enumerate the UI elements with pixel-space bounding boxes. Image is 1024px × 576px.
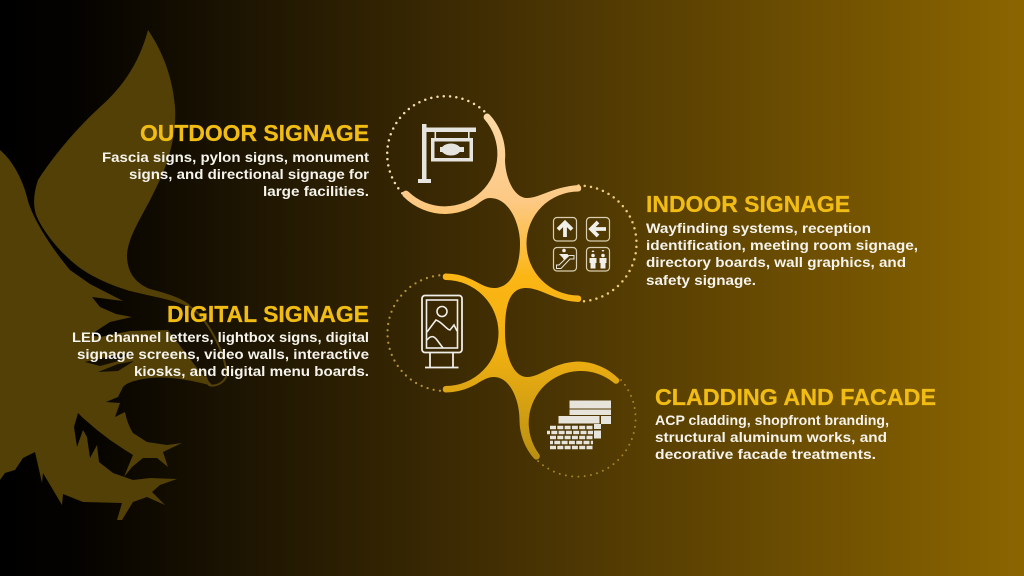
description: digital signage: signage screens, video walls, interactive [77,346,369,362]
description: outdoor signage [102,149,370,199]
dotted arc: outdoor [387,96,489,196]
description: cladding and facade [655,412,889,462]
heading: cladding and facade: CLADDING AND FACADE [655,384,936,410]
eagle feather outline [187,305,227,386]
description: cladding and facade: structural aluminum works, and [655,429,887,445]
description: indoor signage: safety signage. [646,272,756,288]
text block: cladding and facade [655,384,936,462]
heading: digital signage: DIGITAL SIGNAGE [167,301,369,327]
description: indoor signage: Wayfinding systems, reception [646,220,871,236]
eagle wing [34,30,190,306]
description: outdoor signage: large facilities. [263,183,369,199]
description: digital signage [72,329,369,379]
text block: indoor signage [646,191,918,288]
heading: indoor signage: INDOOR SIGNAGE [646,191,850,217]
dotted arc: cladding [534,380,636,477]
diagram: four linked circles [387,96,636,477]
description: digital signage: LED channel letters, lightbox signs, digital [72,329,369,345]
description: indoor signage [646,220,918,288]
icon: cladding panels and bricks [547,400,611,448]
eagle silhouette [0,30,227,520]
icon: digital poster kiosk [422,296,462,368]
pictogram: escalator [554,248,576,271]
pictogram: up arrow [554,218,576,241]
icon: outdoor hanging sign [418,124,476,183]
icon: indoor wayfinding pictograms [554,218,610,271]
description: cladding and facade: decorative facade treatments. [655,446,876,462]
description: indoor signage: identification, meeting room signage, [646,237,918,253]
eagle feather gaps [85,353,134,372]
heading: outdoor signage: OUTDOOR SIGNAGE [140,120,369,146]
text block: digital signage [72,301,369,379]
pictogram: elevator people [586,248,610,271]
dotted arc: indoor [578,186,636,302]
dotted arc: digital [388,275,446,391]
description: outdoor signage: signs, and directional signage for [129,166,370,182]
description: cladding and facade: ACP cladding, shopfront branding, [655,412,889,428]
description: indoor signage: directory boards, wall graphics, and [646,254,906,270]
connected arc ribbon [402,114,619,460]
eagle body and talons [0,150,213,520]
text block: outdoor signage [102,120,370,199]
pictogram: left arrow [586,218,610,241]
description: outdoor signage: Fascia signs, pylon signs, monument [102,149,369,165]
description: digital signage: kiosks, and digital menu boards. [134,363,369,379]
